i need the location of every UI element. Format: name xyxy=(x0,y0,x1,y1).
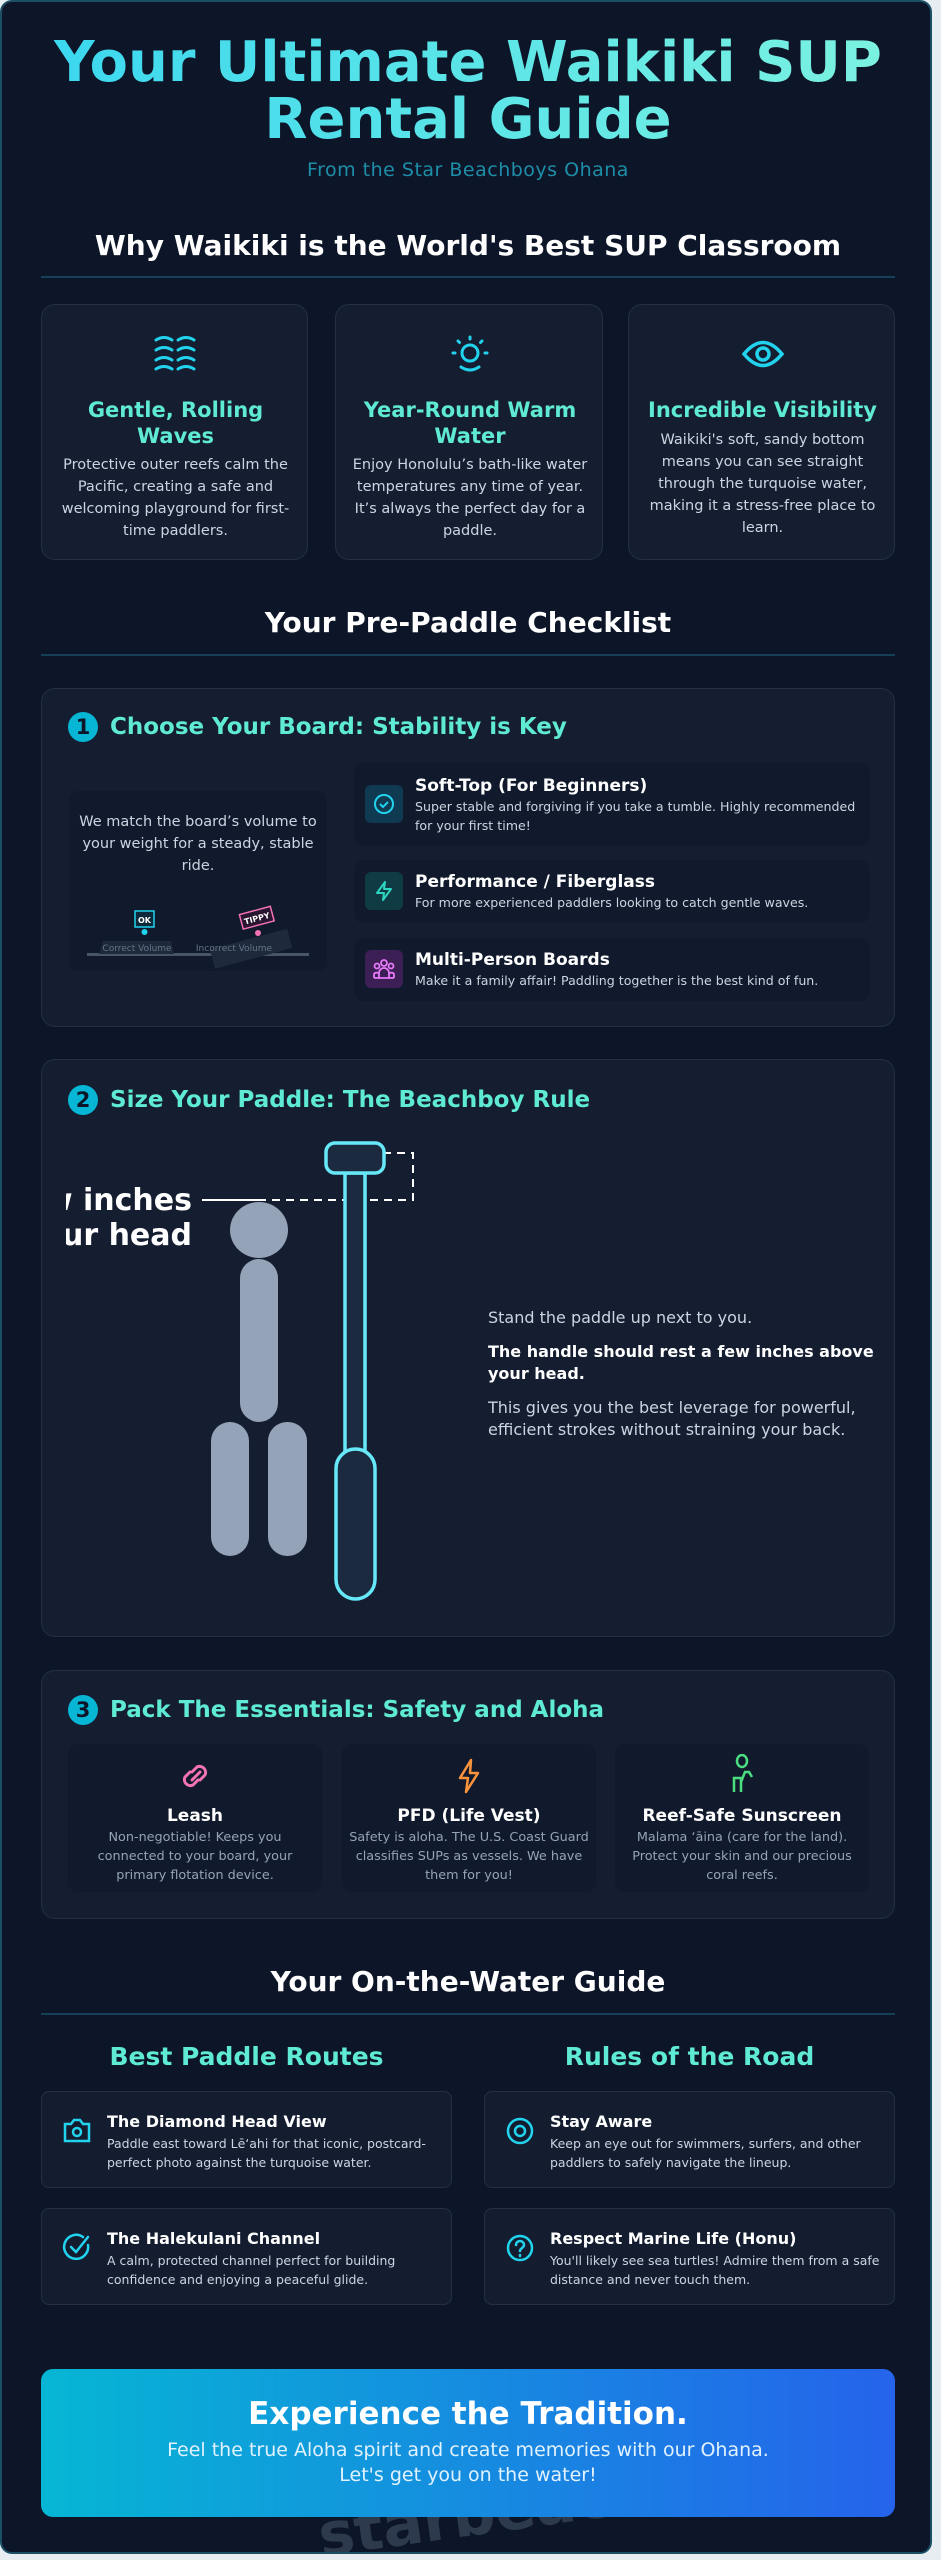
essential: pfd xyxy=(342,1744,596,1892)
title xyxy=(2,34,934,148)
rule: stay aware xyxy=(484,2091,895,2188)
paddle rule text: The handle should rest a few inches above your head. xyxy=(488,1342,874,1383)
item: soft-top xyxy=(354,763,870,846)
heading: step 3: Pack The Essentials: Safety and Aloha xyxy=(110,1697,604,1723)
board volume illustration: OK xyxy=(138,916,152,925)
item: multi-person: Multi-Person Boards xyxy=(415,950,610,970)
essential: leash xyxy=(68,1744,322,1892)
person xyxy=(211,1202,307,1556)
route: diamond head xyxy=(41,2091,452,2188)
route: diamond head: Paddle east toward Lēʻahi for that iconic, postcard-perfect photo against the turquoise water. xyxy=(107,2136,426,2170)
route: halekulani xyxy=(41,2208,452,2305)
card: warm water: Enjoy Honolulu’s bath-like water temperatures any time of year. It’s always the perfect day for a paddle. xyxy=(353,457,587,539)
subtitle: From the Star Beachboys Ohana xyxy=(307,159,629,181)
rule: marine life: You'll likely see sea turtles! Admire them from a safe distance and never touch them. xyxy=(550,2253,879,2287)
title: Rental Guide xyxy=(264,87,672,152)
title: Your Ultimate Waikiki SUP xyxy=(54,30,882,95)
heading: step 1: 1 xyxy=(76,715,90,739)
card: visibility xyxy=(628,304,895,560)
paddle rule text: Stand the paddle up next to you. xyxy=(488,1308,752,1327)
essential: pfd: Safety is aloha. The U.S. Coast Guard classifies SUPs as vessels. We have them for you! xyxy=(349,1830,589,1883)
essential: sunscreen xyxy=(615,1744,869,1892)
essential: sunscreen: Malama ‘āina (care for the land). Protect your skin and our precious coral reefs. xyxy=(632,1830,852,1883)
paddle rule text xyxy=(488,1308,874,1439)
card: gentle waves xyxy=(41,304,308,560)
board volume illustration: We match the board’s volume to your weight for a steady, stable ride. xyxy=(79,814,317,874)
paddle diagram xyxy=(66,1141,414,1601)
paddle xyxy=(326,1143,384,1599)
callout: experience the tradition xyxy=(41,2369,895,2517)
card: visibility: Waikiki's soft, sandy bottom means you can see straight through the turquoise water, making it a stress-free place to learn. xyxy=(650,432,875,536)
panel: choose board xyxy=(41,688,895,1027)
rule: stay aware: Stay Aware xyxy=(550,2112,652,2131)
essential: sunscreen: Reef-Safe Sunscreen xyxy=(642,1806,842,1826)
icon: sun xyxy=(452,336,488,372)
card: gentle waves: Protective outer reefs calm the Pacific, creating a safe and welcoming playground for first-time paddlers. xyxy=(62,457,289,539)
item: performance: Performance / Fiberglass xyxy=(415,872,655,892)
card: visibility: Incredible Visibility xyxy=(648,398,877,422)
panel: paddle size xyxy=(41,1059,895,1637)
paddle rule text: This gives you the best leverage for powerful, efficient strokes without straining your back. xyxy=(488,1398,856,1439)
board volume illustration xyxy=(69,791,327,971)
card: warm water: Year-Round Warm xyxy=(364,398,576,422)
icon: eye xyxy=(742,340,784,368)
rule: marine life xyxy=(484,2208,895,2305)
card: warm water xyxy=(335,304,603,560)
heading: on-the-water: Your On-the-Water Guide xyxy=(271,1965,665,1998)
essential: leash: Leash xyxy=(167,1806,223,1826)
callout: experience the tradition: Experience the Tradition. xyxy=(248,2396,688,2432)
heading: why waikiki: Why Waikiki is the World's Best SUP Classroom xyxy=(95,229,841,262)
heading: checklist: Your Pre-Paddle Checklist xyxy=(265,606,671,639)
subheading: rules: Rules of the Road xyxy=(565,2042,814,2071)
heading: step 2: Size Your Paddle: The Beachboy Rule xyxy=(110,1087,590,1113)
icon: waves xyxy=(154,336,196,371)
route: diamond head: The Diamond Head View xyxy=(107,2112,327,2131)
item: multi-person xyxy=(354,938,870,1001)
item: performance xyxy=(354,860,870,923)
route: halekulani: The Halekulani Channel xyxy=(107,2229,320,2248)
item: soft-top: Super stable and forgiving if you take a tumble. Highly recommended for your first time! xyxy=(415,799,855,833)
card: gentle waves: Waves xyxy=(137,424,214,448)
item: multi-person: Make it a family affair! Paddling together is the best kind of fun. xyxy=(415,973,818,988)
essential: leash: Non-negotiable! Keeps you connected to your board, your primary flotation device. xyxy=(98,1830,292,1883)
subheading: routes: Best Paddle Routes xyxy=(109,2042,384,2071)
card: warm water: Water xyxy=(434,424,506,448)
heading: step 3: 3 xyxy=(76,1698,90,1722)
essential: pfd: PFD (Life Vest) xyxy=(397,1806,541,1826)
board volume illustration: Correct Volume xyxy=(102,944,172,954)
rule: marine life: Respect Marine Life (Honu) xyxy=(550,2229,796,2248)
callout: experience the tradition: Feel the true Aloha spirit and create memories with our Ohana. xyxy=(167,2439,769,2461)
heading: step 2: 2 xyxy=(76,1088,90,1112)
card: gentle waves: Gentle, Rolling xyxy=(88,398,263,422)
item: performance: For more experienced paddlers looking to catch gentle waves. xyxy=(415,895,808,910)
heading: step 1: Choose Your Board: Stability is Key xyxy=(110,714,567,740)
board volume illustration: Incorrect Volume xyxy=(196,944,273,954)
callout: experience the tradition: Let's get you on the water! xyxy=(339,2464,597,2486)
route: halekulani: A calm, protected channel perfect for building confidence and enjoying a peaceful glide. xyxy=(107,2253,395,2287)
panel: essentials xyxy=(41,1670,895,1919)
rule: stay aware: Keep an eye out for swimmers, surfers, and other paddlers to safely navigate the lineup. xyxy=(550,2136,861,2170)
board volume illustration: TIPPY xyxy=(243,911,271,926)
item: soft-top: Soft-Top (For Beginners) xyxy=(415,776,647,796)
label: a few inches above your head xyxy=(66,1187,191,1246)
